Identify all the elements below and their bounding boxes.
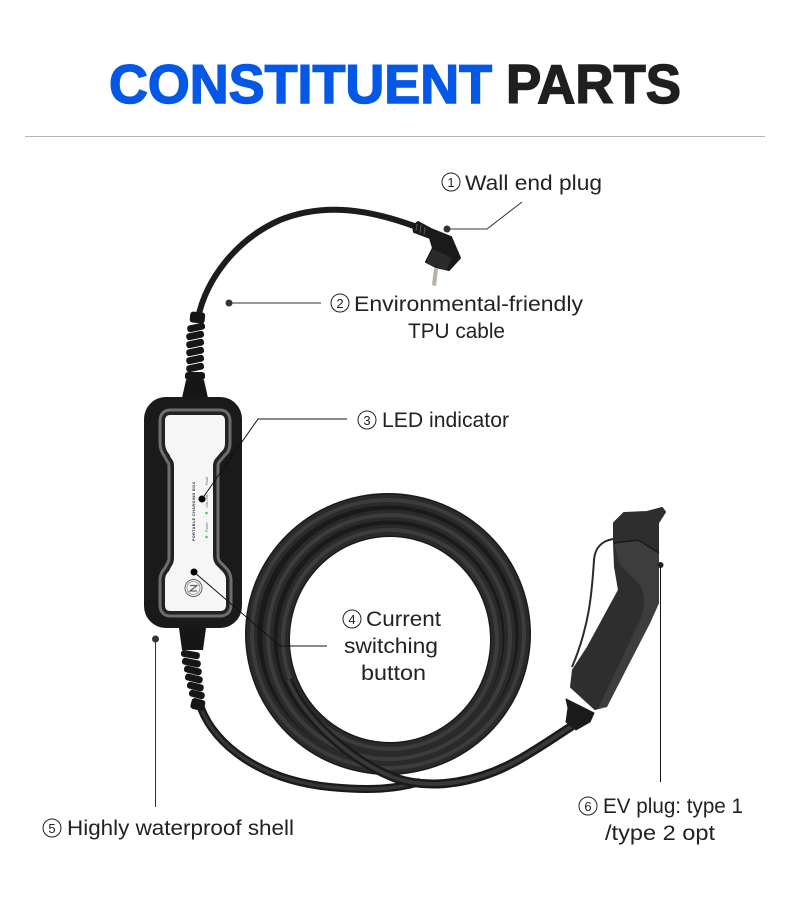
callout: EV plug: EV plug: type 1: [603, 795, 743, 818]
callout: TPU cable: Environmental-friendly: [354, 293, 584, 316]
callout: waterproof shell: [43, 636, 294, 840]
callout: LED indicator: 3: [363, 413, 371, 428]
callout: wall end plug: Wall end plug: [465, 172, 602, 195]
box label text: PORTABLE CHARGING BOX: [192, 481, 196, 541]
grey bezel: [165, 415, 226, 611]
callout: LED indicator: LED indicator: [382, 409, 509, 432]
cable: upper TPU cable: [198, 210, 414, 318]
callout: current switching button: button: [361, 662, 426, 685]
icon: switching button: [185, 580, 202, 596]
white faceplate: [165, 415, 226, 611]
icon: EV plug: [566, 508, 665, 730]
callout: EV plug: 6: [584, 799, 592, 814]
inner bezel groove: [165, 415, 226, 611]
LED labels: [205, 477, 209, 538]
callout: TPU cable: [226, 293, 584, 343]
callout: current switching button: [190, 568, 441, 685]
LED labels: 12A 16A: [205, 494, 209, 508]
title: [109, 53, 681, 115]
LED labels: Power: [205, 521, 209, 532]
callout: TPU cable: 2: [336, 296, 344, 311]
cable: EV plug cable: [288, 680, 572, 784]
callout: waterproof shell: 5: [48, 821, 56, 836]
charging control box: [144, 397, 242, 628]
icon: strain relief upper: [182, 311, 208, 398]
callout: wall end plug: 1: [447, 175, 455, 190]
callout: current switching button: switching: [344, 635, 438, 658]
callout: wall end plug: [442, 172, 602, 232]
icon: strain relief lower: [179, 628, 206, 712]
callout: LED indicator: [198, 409, 509, 502]
cable coil: [245, 493, 531, 775]
cable: lower cable from box: [201, 708, 420, 789]
title: CONSTITUENT: [109, 53, 492, 115]
callout: EV plug: [579, 562, 743, 845]
LED labels: Fault: [205, 477, 209, 485]
callout: current switching button: Current: [366, 608, 441, 631]
title: PARTS: [506, 53, 681, 115]
callout: EV plug: /type 2 opt: [605, 822, 715, 845]
callout: current switching button: 4: [348, 612, 356, 627]
icon: wall end plug: [413, 222, 460, 286]
callout: TPU cable: TPU cable: [408, 320, 505, 343]
callout: waterproof shell: Highly waterproof shell: [67, 817, 294, 840]
